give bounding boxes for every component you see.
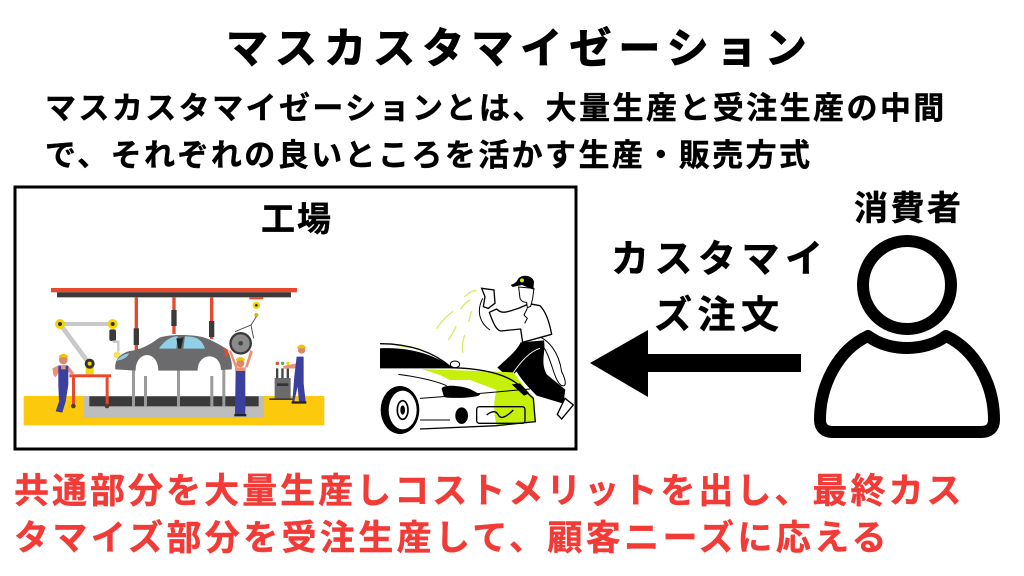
conclusion text (14, 472, 965, 558)
panel: factory (15, 187, 576, 449)
customize order label: カスタマイ (611, 239, 829, 281)
trousers (497, 340, 565, 404)
painter (479, 276, 573, 419)
worker right (283, 345, 306, 404)
car body (115, 335, 232, 371)
customize order label: ズ注文 (654, 294, 785, 337)
factory heading: 工場 (261, 201, 333, 239)
cap (511, 276, 534, 290)
icon: consumer person (820, 241, 994, 432)
worker centre (229, 350, 253, 416)
intro text block (45, 91, 947, 173)
hose (479, 298, 565, 386)
car (380, 344, 535, 429)
control box (269, 362, 293, 400)
intro text block: マスカスタマイゼーションとは、大量生産と受注生産の中間 (45, 91, 947, 126)
title: マスカスタマイゼーション (226, 25, 814, 72)
robot arm (55, 319, 120, 374)
intro text block: で、それぞれの良いところを活かす生産・販売方式 (45, 138, 812, 173)
jacket (489, 304, 552, 342)
spray (437, 290, 476, 352)
head (519, 287, 534, 308)
table (69, 374, 111, 405)
consumer label: 消費者 (854, 190, 964, 228)
shoe (557, 398, 573, 419)
illustration: painter spraying car (380, 276, 573, 434)
illustration: car assembly line (24, 288, 324, 425)
conclusion text: 共通部分を大量生産しコストメリットを出し、最終カス (14, 472, 965, 511)
spray gun (482, 288, 495, 308)
conclusion text: タマイズ部分を受注生産して、顧客ニーズに応える (14, 518, 890, 558)
customize order label (611, 239, 829, 337)
arrow (590, 330, 801, 397)
worker left (52, 354, 74, 413)
wheel (381, 386, 419, 434)
wheel hoist (229, 297, 263, 355)
